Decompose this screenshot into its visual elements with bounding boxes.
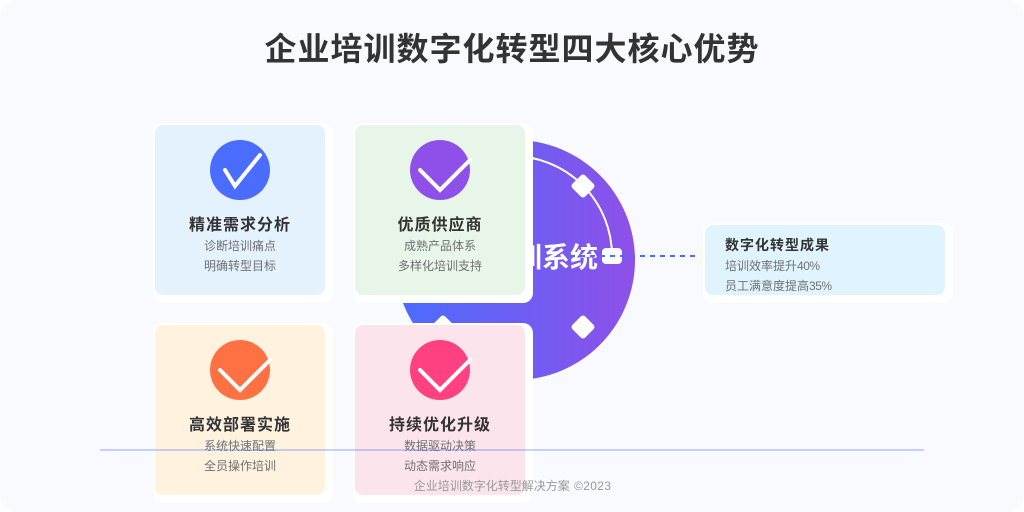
description: 数据驱动决策 — [404, 438, 476, 453]
description — [725, 258, 832, 293]
description: 系统快速配置 — [204, 439, 276, 453]
central hub circle: 企业培训系统 — [430, 242, 598, 273]
description — [404, 438, 476, 473]
icon: orange check — [210, 340, 270, 400]
heading: 数字化转型成果 — [725, 237, 830, 253]
heading: 高效部署实施 — [189, 415, 291, 434]
title: 企业培训数字化转型四大核心优势 — [264, 31, 760, 67]
heading: 优质供应商 — [397, 215, 483, 234]
description: 全员操作培训 — [204, 458, 276, 473]
description: 明确转型目标 — [204, 258, 276, 273]
description: 培训效率提升40% — [725, 258, 820, 273]
footer: 企业培训数字化转型解决方案 ©2023 — [414, 478, 611, 493]
description: 成熟产品体系 — [404, 238, 476, 253]
description: 员工满意度提高35% — [725, 278, 832, 293]
description — [204, 439, 276, 473]
panel: 数字化转型成果 — [703, 223, 953, 303]
description: 动态需求响应 — [404, 458, 476, 473]
central hub circle — [395, 140, 635, 380]
description: 多样化培训支持 — [398, 258, 482, 273]
panel: 优质供应商 — [353, 123, 533, 303]
heading: 持续优化升级 — [389, 415, 491, 434]
icon: purple check — [410, 140, 470, 200]
panel: 精准需求分析 — [153, 123, 333, 303]
dashed connector — [570, 255, 695, 257]
panel: 高效部署实施 — [153, 323, 333, 503]
description — [398, 238, 482, 273]
icon: pink check — [410, 340, 470, 400]
divider line — [100, 449, 924, 451]
description — [204, 238, 276, 273]
heading: 精准需求分析 — [189, 215, 291, 234]
icon: blue check — [210, 140, 270, 200]
description: 诊断培训痛点 — [204, 238, 276, 253]
panel: 持续优化升级 — [353, 323, 533, 503]
